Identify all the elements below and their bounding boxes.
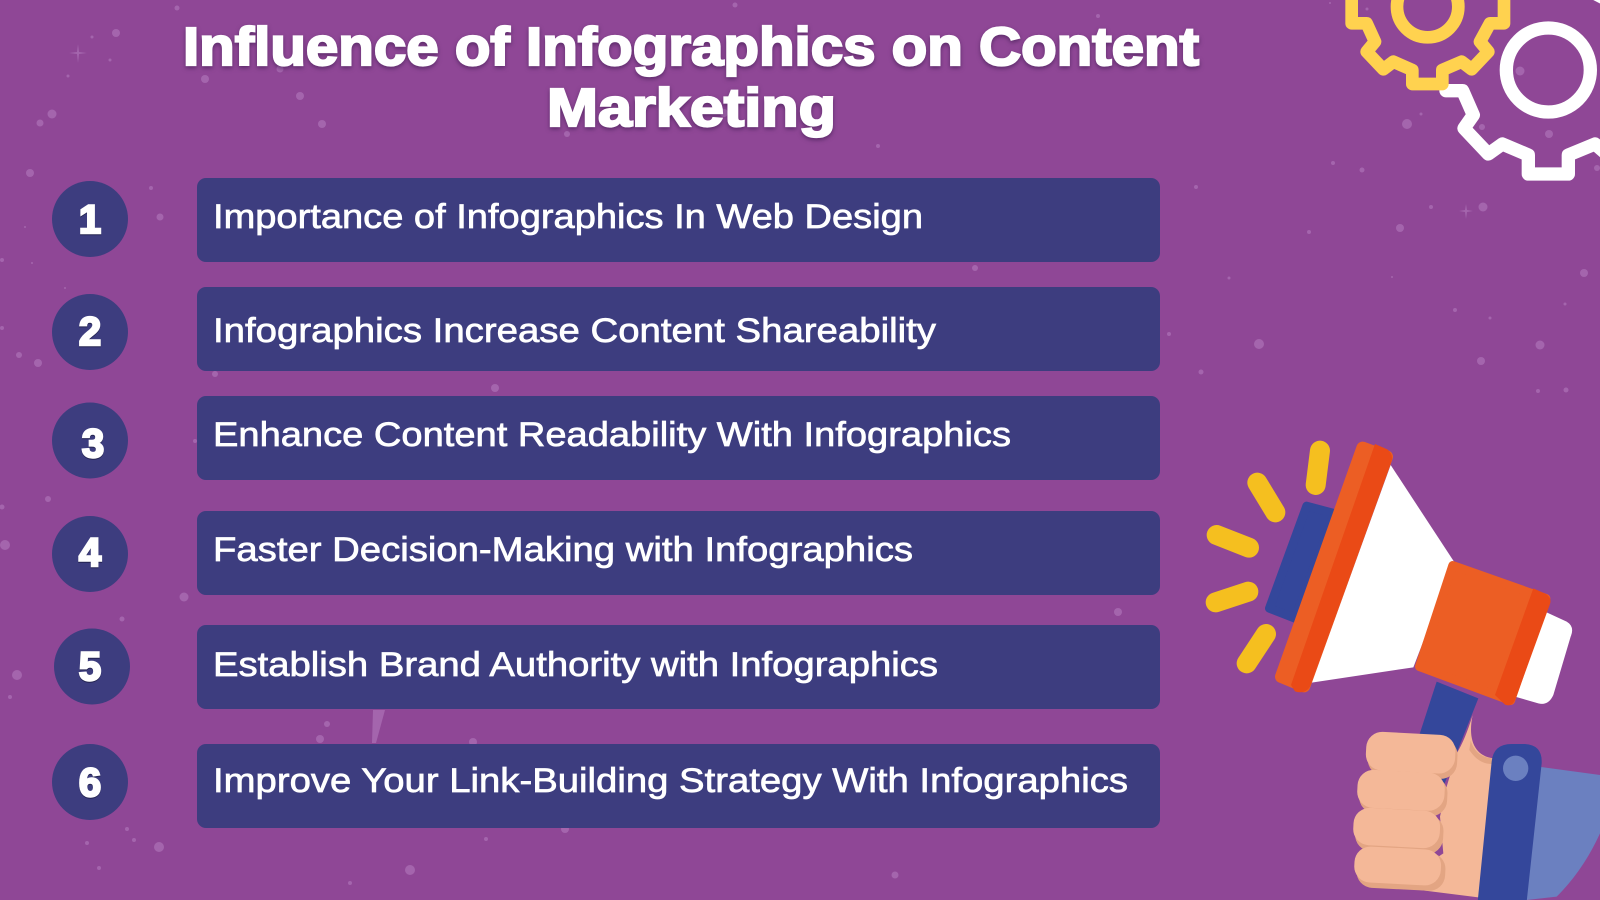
megaphone white cone <box>1312 465 1454 683</box>
bar 1: Importance of Infographics In Web Design <box>213 198 923 236</box>
sound rays <box>1216 451 1320 663</box>
megaphone handle <box>1413 682 1478 787</box>
icon: megaphone with hand <box>1216 444 1600 900</box>
title: Influence of Infographics on Content <box>183 17 1199 77</box>
megaphone rim shade <box>1291 444 1392 692</box>
white gear <box>1446 0 1600 174</box>
row 2 <box>52 287 1160 371</box>
megaphone rear cap <box>1515 612 1572 704</box>
bar 1 <box>197 178 1160 262</box>
bar 2: Infographics Increase Content Shareability <box>213 312 937 350</box>
bar 2 <box>197 287 1160 371</box>
megaphone body shade <box>1495 588 1550 705</box>
finger 3 <box>1352 807 1444 855</box>
palm <box>1393 715 1493 897</box>
number badge 1 <box>52 181 128 257</box>
title <box>183 17 1199 138</box>
row 3 <box>52 396 1160 480</box>
row 1 <box>52 178 1160 262</box>
bar 4: Faster Decision-Making with Infographics <box>213 531 913 569</box>
icon: gears <box>1352 0 1600 174</box>
row 4 <box>52 511 1160 595</box>
palm crease <box>1469 741 1493 764</box>
number badge 3: 3 <box>82 422 104 466</box>
bar 4 <box>197 511 1160 595</box>
bar 5: Establish Brand Authority with Infographics <box>213 646 938 684</box>
row 6 <box>52 744 1160 828</box>
megaphone back block <box>1269 506 1334 618</box>
number badge 5: 5 <box>79 645 101 689</box>
number badge 4 <box>52 516 128 592</box>
number badge 5 <box>54 628 130 704</box>
finger 1 <box>1365 731 1458 780</box>
number badge 2: 2 <box>79 310 101 354</box>
bar 3: Enhance Content Readability With Infographics <box>213 416 1011 454</box>
number badge 4: 4 <box>79 531 102 575</box>
bar 3 <box>197 396 1160 480</box>
number badge 3 <box>52 402 128 478</box>
bar 5 <box>197 625 1160 709</box>
title: Marketing <box>547 78 836 138</box>
number badge 6 <box>52 744 128 820</box>
finger 4 <box>1353 846 1446 892</box>
row 5 <box>54 625 1160 709</box>
bar 6: Improve Your Link-Building Strategy With Infographics <box>213 762 1128 800</box>
yellow gear <box>1352 0 1504 84</box>
number badge 1: 1 <box>79 198 101 242</box>
cuff button <box>1503 756 1528 781</box>
megaphone body <box>1419 565 1546 701</box>
number badge 6: 6 <box>79 761 101 805</box>
bar 6 <box>197 744 1160 828</box>
cuff <box>1478 744 1542 900</box>
number badge 2 <box>52 294 128 370</box>
finger 2 <box>1356 769 1448 817</box>
megaphone rim <box>1281 448 1387 686</box>
sleeve <box>1527 767 1600 900</box>
